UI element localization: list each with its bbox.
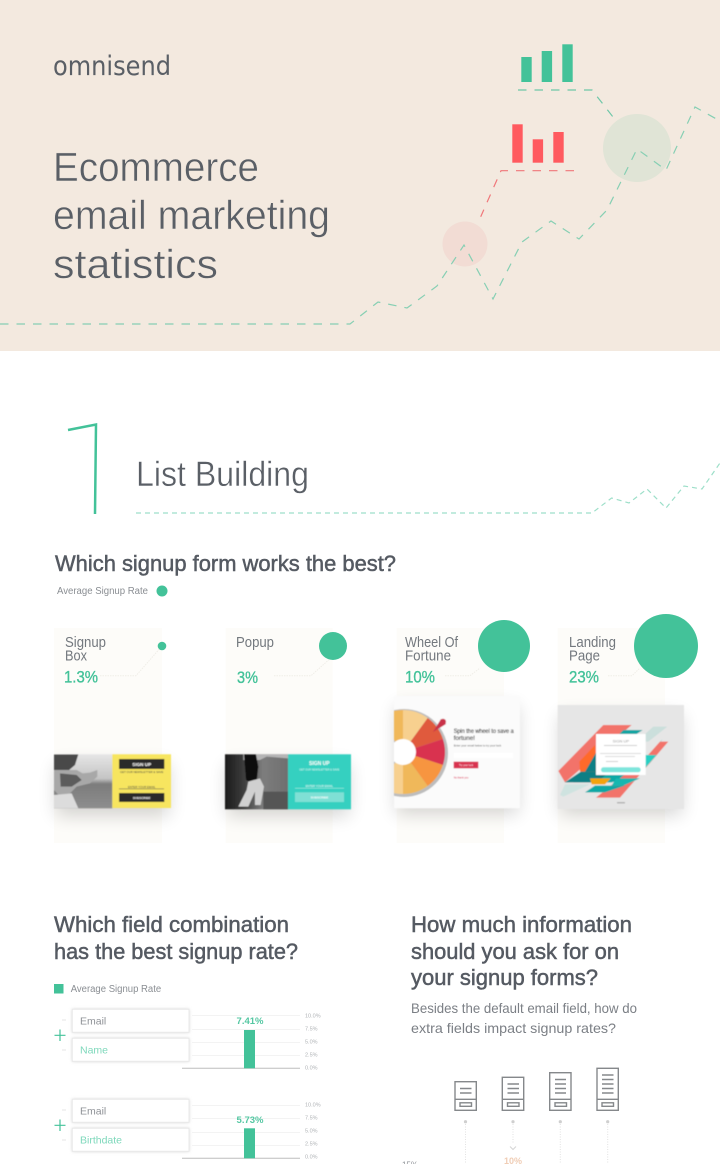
section heading: List Building: List Building	[136, 455, 309, 494]
form screenshot: spin wheel: Enter your email below to try your luck	[454, 744, 502, 748]
value: 10%: 10%	[405, 668, 435, 687]
form screenshot: landing page: SIGN UP	[613, 738, 629, 744]
panel: signup box	[54, 628, 171, 843]
axis labels: 0.0%	[305, 1066, 318, 1072]
text block: description	[411, 1000, 637, 1036]
label: landing page: Landing	[569, 635, 616, 651]
panel: landing page	[558, 614, 698, 843]
form screenshot: teal popup: GET OUR NEWSLETTER & SAVE	[299, 768, 340, 772]
form screenshot: teal popup: SUBSCRIBE	[311, 796, 328, 800]
value: 7.41%: 7.41%	[237, 1016, 264, 1027]
form screenshot: teal popup	[225, 754, 351, 809]
label: signup box: Signup	[65, 635, 106, 651]
label: popup: Popup	[236, 635, 274, 651]
bar: 5.73%	[244, 1128, 255, 1158]
text block: description: extra fields impact signup rates?	[411, 1020, 616, 1036]
form screenshot: yellow signup box: GET OUR NEWSLETTER & SAVE	[120, 770, 163, 774]
icon: form with 2 extra fields	[502, 1077, 524, 1110]
section trend line	[136, 463, 720, 513]
legend: average signup rate: Average Signup Rate	[57, 586, 148, 597]
form screenshot: yellow signup box: ENTER YOUR EMAIL	[128, 785, 156, 789]
label: signup box: Box	[65, 649, 88, 665]
axis labels: 10.0%	[305, 1014, 321, 1020]
heading: How much information	[411, 912, 632, 990]
label: wheel of fortune: Wheel Of	[405, 635, 459, 651]
heading: How much information: should you ask for on	[411, 939, 619, 964]
axis labels: 0.0%	[305, 1154, 318, 1160]
label: wheel of fortune: Fortune	[405, 649, 451, 665]
heading: Which field combination: has the best signup rate?	[54, 939, 298, 964]
value: 3%: 3%	[237, 668, 258, 687]
bubble: 23%	[634, 614, 698, 678]
text block: description: Besides the default email field, how do	[411, 1000, 637, 1016]
connector	[445, 668, 480, 676]
form screenshot: yellow signup box: SUBSCRIBE	[133, 796, 151, 800]
legend: average signup rate square: Average Signup Rate	[71, 984, 162, 995]
form screenshot: yellow signup box: SIGN UP	[132, 762, 151, 767]
panel: wheel of fortune	[389, 620, 530, 826]
value: 5.73%: 5.73%	[237, 1115, 264, 1126]
panel: header banner	[0, 0, 720, 351]
heading: Which field combination: Which field combination	[54, 912, 289, 937]
highlight circle: pink	[442, 222, 488, 266]
bar: 7.41%	[244, 1030, 255, 1068]
icon: form with 1 extra field	[455, 1082, 476, 1110]
icon: prize wheel	[393, 708, 448, 798]
title: Ecommerce	[53, 144, 259, 190]
axis labels: 7.5%	[305, 1026, 318, 1032]
title: email marketing	[53, 192, 330, 238]
form screenshot: landing page	[558, 705, 684, 809]
axis labels: 7.5%	[305, 1116, 318, 1122]
highlight circle: green	[603, 114, 671, 182]
title: statistics	[53, 241, 218, 287]
bubble: 1.3%	[158, 642, 166, 650]
connector	[608, 668, 640, 676]
form fields: email + birthdate: Birthdate	[80, 1134, 122, 1146]
connector	[274, 656, 333, 676]
form screenshot: spin wheel: Try your luck	[459, 764, 474, 767]
form fields: email + birthdate: Email	[80, 1106, 106, 1118]
form fields: email + name: Email	[80, 1016, 106, 1028]
value: 1.3%: 1.3%	[64, 668, 98, 687]
form screenshot: spin wheel: fortune!	[454, 735, 475, 742]
chart: email and birthdate	[54, 1099, 321, 1160]
heading: Which field combination	[54, 912, 298, 964]
axis labels: 5.0%	[305, 1128, 318, 1134]
icon: form with 3 extra fields	[550, 1073, 571, 1110]
logo: omnisend: omnisend	[53, 51, 171, 82]
axis labels	[305, 1102, 321, 1160]
form screenshot: spin wheel	[393, 698, 520, 808]
bubble: 3%	[319, 632, 347, 660]
label: wheel of fortune	[405, 635, 459, 665]
bar chart icon: rising green bars	[521, 44, 573, 82]
form screenshot: yellow signup box	[54, 754, 171, 808]
title	[53, 144, 330, 287]
connector	[100, 646, 162, 676]
panel: popup	[225, 628, 351, 843]
form fields: email + name	[54, 1009, 189, 1061]
axis labels: 5.0%	[305, 1040, 318, 1046]
heading: How much information: How much information	[411, 912, 632, 937]
label: signup box	[65, 635, 106, 665]
section numeral: 1	[68, 424, 96, 514]
axis labels	[305, 1014, 321, 1072]
chart: number of form fields	[402, 1068, 618, 1164]
trend line: dashed green	[0, 107, 720, 324]
form screenshot: teal popup: ENTER YOUR EMAIL	[306, 784, 333, 788]
axis labels: 2.5%	[305, 1142, 318, 1148]
heading: How much information: your signup forms?	[411, 965, 598, 990]
axis labels: 10.0%	[305, 1102, 321, 1108]
icon: form with 4 extra fields	[597, 1068, 618, 1110]
heading: Which signup form works the best?: Which signup form works the best?	[55, 551, 396, 576]
form fields: email + name: Name	[80, 1044, 108, 1056]
form screenshot: teal popup: SIGN UP	[309, 761, 330, 767]
axis labels: 2.5%	[305, 1052, 318, 1058]
connector: red dashed	[481, 171, 574, 217]
value: 23%: 23%	[569, 668, 599, 687]
form screenshot: spin wheel: No thank you	[454, 776, 469, 780]
label: landing page	[569, 635, 616, 665]
connector: green dashed	[518, 90, 613, 117]
form fields: email + birthdate	[54, 1099, 189, 1151]
bubble: 10%	[478, 620, 530, 672]
bar chart icon: red bars	[512, 124, 564, 163]
form screenshot: spin wheel: Spin the wheel to save a	[454, 728, 514, 735]
label: landing page: Page	[569, 649, 600, 665]
chart: email and name	[54, 1009, 321, 1072]
